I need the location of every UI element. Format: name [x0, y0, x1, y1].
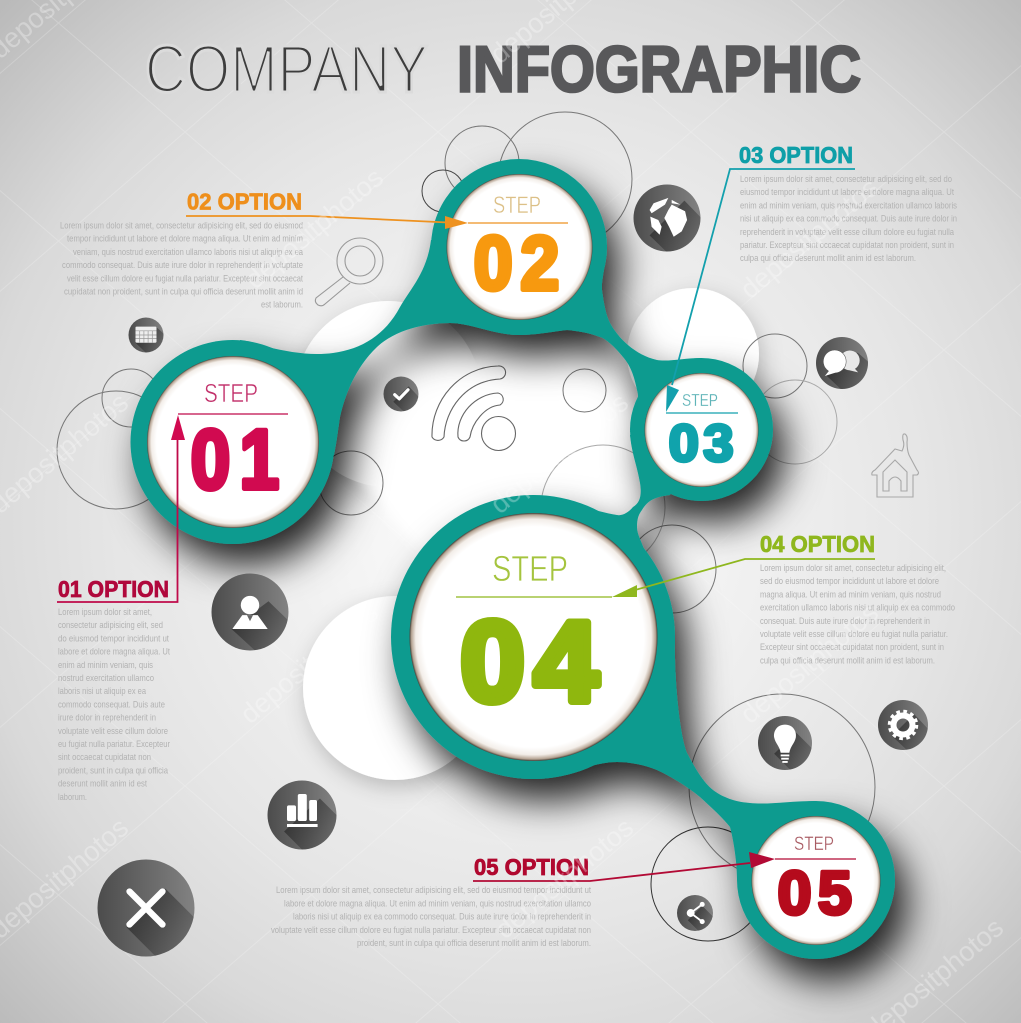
text block: 02: est laborum.: [261, 300, 303, 310]
step 1: [147, 356, 319, 528]
step 2 label: STEP: [493, 192, 541, 219]
step 2 disc: [446, 174, 592, 320]
arrow: 02 option: [186, 216, 568, 229]
text block: 04: magna aliqua. Ut enim ad minim veniam, quis nostrud: [760, 589, 941, 599]
text block: 01: laboris nisi ut aliquip ex ea: [58, 686, 147, 696]
text block: 04: Excepteur sint occaecat cupidatat non proident, sunt in: [760, 642, 944, 652]
icon: calendar: [128, 318, 164, 352]
text block: 02: [60, 220, 304, 310]
step 2: [446, 174, 592, 320]
watermarks: depositphotos: [484, 387, 634, 520]
text block: 05: laboris nisi ut aliquip ex ea commodo consequat. Duis aute irure dolor in reprehenderit in: [293, 912, 591, 922]
text block: 01: deserunt mollit anim id est: [58, 779, 147, 789]
text block: 04: Lorem ipsum dolor sit amet, consectetur adipisicing elit,: [760, 563, 946, 573]
arrow: 04 option: [456, 559, 875, 597]
text block: 02: commodo consequat. Duis aute irure dolor in reprehenderit in voluptate: [62, 260, 303, 270]
white centre area: [350, 335, 650, 560]
step 5 disc: [752, 816, 880, 945]
arrow: 05 option: [473, 852, 856, 881]
text block: 04: voluptate velit esse cillum dolore eu fugiat nulla pariatur.: [760, 629, 948, 639]
step 3 number: 03: [669, 415, 734, 473]
text block: 05: proident, sunt in culpa qui officia deserunt mollit anim id est laborum.: [357, 938, 591, 948]
text block: 03: eiusmod tempor incididunt ut labore et dolore magna aliqua. Ut: [740, 187, 954, 197]
text block: 05: labore et dolore magna aliqua. Ut enim ad minim veniam, quis nostrud exercitation ullamco: [284, 898, 591, 908]
icon: close: [98, 860, 194, 956]
title: [145, 32, 861, 107]
text block: 03: reprehenderit in voluptate velit esse cillum dolore eu fugiat nulla: [740, 227, 955, 237]
icon: chart: [268, 780, 336, 850]
step 1 label: STEP: [204, 378, 258, 408]
text block: 03: Lorem ipsum dolor sit amet, consectetur adipisicing elit, sed do: [740, 174, 952, 184]
watermarks: depositphotos: [239, 162, 389, 295]
text block: 03: culpa qui officia deserunt mollit anim id est laborum.: [740, 253, 916, 263]
text block: 03: enim ad minim veniam, quis nostrud exercitation ullamco laboris: [740, 200, 957, 210]
option heading: 03: 03 OPTION: [739, 142, 853, 168]
text block: 02: cupidatat non proident, sunt in culpa qui officia deserunt mollit anim id: [64, 286, 303, 296]
text block: 01: consectetur adipisicing elit, sed: [58, 620, 163, 630]
step 1 number: 01: [191, 412, 279, 507]
connector 3 to 4: [533, 430, 701, 637]
icon: gear: [878, 700, 928, 750]
text block: 05: voluptate velit esse cillum dolore eu fugiat nulla pariatur. Excepteur sint occaecat cupidatat non: [271, 925, 591, 935]
teal connected rings: [130, 159, 895, 959]
text block: 01: laborum.: [58, 792, 87, 802]
icon: share: [677, 895, 713, 931]
watermarks: depositphotos: [734, 172, 884, 305]
ring: step 4 outer: [391, 495, 675, 779]
option heading: 01: 01 OPTION: [58, 576, 169, 602]
title: infographic: INFOGRAPHIC: [457, 32, 861, 106]
watermarks: depositphotos: [734, 597, 884, 730]
text block: 04: culpa qui officia deserunt mollit anim id est laborum.: [760, 655, 935, 665]
option heading: 04: 04 OPTION: [760, 531, 875, 557]
step 4 number: 04: [460, 599, 598, 726]
step 4 label: STEP: [492, 548, 568, 589]
step 5 label: STEP: [794, 834, 834, 855]
arrow: 01 option: [57, 414, 288, 602]
text block: 04: consequat. Duis aute irure dolor in reprehenderit in: [760, 616, 930, 626]
connector 2 to 3: [519, 245, 701, 432]
watermarks: depositphotos: [489, 812, 639, 945]
ring: step 2 outer: [431, 159, 607, 335]
text block: 01: enim ad minim veniam, quis: [58, 660, 153, 670]
text block: 01: commodo consequat. Duis aute: [58, 699, 165, 709]
title: company: COMPANY: [145, 32, 428, 107]
text block: 01: nostrud exercitation ullamco: [58, 673, 154, 683]
text block: 01: labore et dolore magna aliqua. Ut: [58, 647, 170, 657]
text block: 04: sed do eiusmod tempor incididunt ut labore et dolore: [760, 576, 939, 586]
text block: 01: do eiusmod tempor incididunt ut: [58, 633, 169, 643]
icon: globe: [634, 184, 700, 252]
icon: magnifier outline: [315, 238, 383, 306]
icon: house outline: [872, 434, 918, 497]
text block: 04: exercitation ullamco laboris nisi ut aliquip ex ea commodo: [760, 603, 955, 613]
text block: 05: Lorem ipsum dolor sit amet, consectetur adipisicing elit, sed do eiusmod tempor incididunt ut: [276, 885, 591, 895]
text block: 02: tempor incididunt ut labore et dolore magna aliqua. Ut enim ad minim: [67, 234, 303, 244]
connector 4 to 5: [533, 637, 816, 880]
step 3 disc: [644, 373, 758, 487]
text block: 01: voluptate velit esse cillum dolore: [58, 726, 168, 736]
step 2 number: 02: [474, 222, 559, 306]
connector 1 to 2: [232, 240, 519, 455]
text block: 05: [271, 885, 591, 948]
text block: 01: Lorem ipsum dolor sit amet,: [58, 607, 152, 617]
step 1 disc: [147, 356, 319, 528]
arrow: 03 option: [666, 169, 855, 413]
icon: light bulb: [758, 716, 812, 770]
icon: wifi outline: [432, 366, 516, 450]
thin outline circles: [57, 112, 875, 941]
text block: 03: [740, 174, 957, 263]
icon: chat: [816, 337, 868, 389]
ring: step 3 outer: [630, 358, 773, 501]
step 4 disc: [410, 513, 658, 761]
text block: 02: velit esse cillum dolore eu fugiat nulla pariatur. Excepteur sint occaecat: [67, 273, 303, 283]
text block: 01: irure dolor in reprehenderit in: [58, 713, 156, 723]
ring: step 1 outer: [130, 340, 334, 544]
text block: 03: nisi ut aliquip ex ea commodo consequat. Duis aute irure dolor in: [740, 214, 957, 224]
text block: 02: Lorem ipsum dolor sit amet, consectetur adipisicing elit, sed do eiusmod: [60, 220, 303, 230]
option heading: 05: 05 OPTION: [474, 854, 589, 880]
text block: 04: [760, 563, 955, 665]
option heading: 02: 02 OPTION: [187, 188, 302, 214]
text block: 01: proident, sunt in culpa qui officia: [58, 765, 169, 775]
text block: 01: eu fugiat nulla pariatur. Excepteur: [58, 739, 170, 749]
watermarks: depositphotos: [234, 597, 384, 730]
icon: person: [212, 574, 288, 650]
text block: 03: pariatur. Excepteur sint occaecat cupidatat non proident, sunt in: [740, 240, 954, 250]
white background circles: [295, 288, 759, 780]
text block: 02: veniam, quis nostrud exercitation ullamco laboris nisi ut aliquip ex ea: [73, 247, 304, 257]
icon: check: [384, 376, 418, 412]
step 5: [752, 816, 880, 945]
step 5 number: 05: [778, 859, 852, 927]
step 4: [410, 513, 658, 761]
text block: 01: [58, 607, 170, 802]
ring: step 5 outer: [737, 801, 895, 959]
step 3 label: STEP: [682, 390, 718, 410]
text block: 01: sint occaecat cupidatat non: [58, 752, 151, 762]
step 3: [644, 373, 758, 487]
